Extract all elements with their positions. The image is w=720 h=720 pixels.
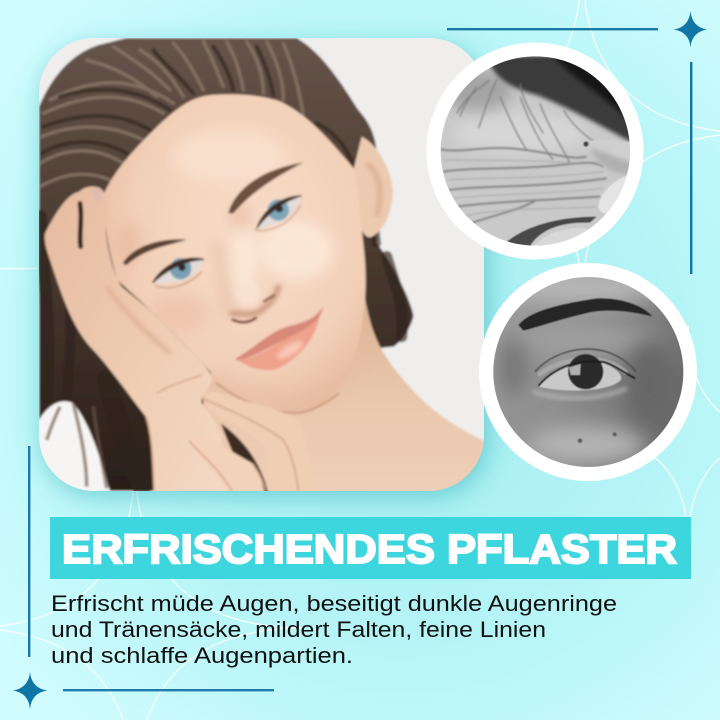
hair strands (457, 80, 597, 163)
description text: Erfrischt müde Augen, beseitigt dunkle Augenringe (51, 591, 617, 616)
decorative line: left (28, 446, 30, 657)
title: ERFRISCHENDES PFLASTER (62, 526, 677, 572)
decorative line: top (447, 28, 658, 30)
eyebrow (518, 298, 653, 331)
panel: portrait of woman (30, 30, 497, 503)
decorative line: bottom (63, 689, 274, 691)
eyelid crease (538, 359, 627, 375)
portrait background (39, 38, 484, 442)
face (104, 94, 366, 413)
description text: und Tränensäcke, mildert Falten, feine Linien (51, 617, 546, 642)
title banner (50, 517, 691, 579)
eye (538, 363, 621, 391)
neck and shoulder (202, 299, 484, 491)
skin tone (493, 277, 684, 467)
forehead artwork (440, 56, 630, 246)
eyebrows (123, 239, 187, 265)
gap between hands (220, 423, 270, 491)
dark hairline (487, 53, 637, 143)
hair (39, 38, 413, 491)
icon: sparkle top right (674, 11, 707, 47)
circle: eye with dark circles (479, 263, 697, 481)
hair strands (40, 42, 303, 187)
description text: und schlaffe Augenpartien. (51, 643, 353, 668)
under-eye fold (533, 388, 627, 398)
fingers under chin (202, 394, 284, 414)
lips (238, 313, 320, 370)
nose (232, 287, 278, 314)
gap between fingers (76, 200, 85, 250)
panel shadow (42, 46, 488, 496)
facial shading (120, 132, 335, 329)
forehead wrinkles (440, 148, 607, 223)
ear (352, 137, 393, 237)
decorative line: right (690, 62, 692, 274)
forehead skin (440, 56, 630, 246)
portrait artwork (30, 30, 497, 503)
eye artwork (493, 277, 684, 467)
eye left (153, 258, 204, 288)
hair wisps over white area (47, 403, 107, 488)
hand on head (45, 186, 230, 503)
fingers (590, 140, 630, 146)
description text (51, 591, 617, 668)
circle: forehead wrinkles (426, 42, 644, 260)
eyebrow and eyelid (534, 228, 588, 246)
icon: sparkle bottom left (13, 672, 47, 709)
eye right (254, 196, 302, 231)
